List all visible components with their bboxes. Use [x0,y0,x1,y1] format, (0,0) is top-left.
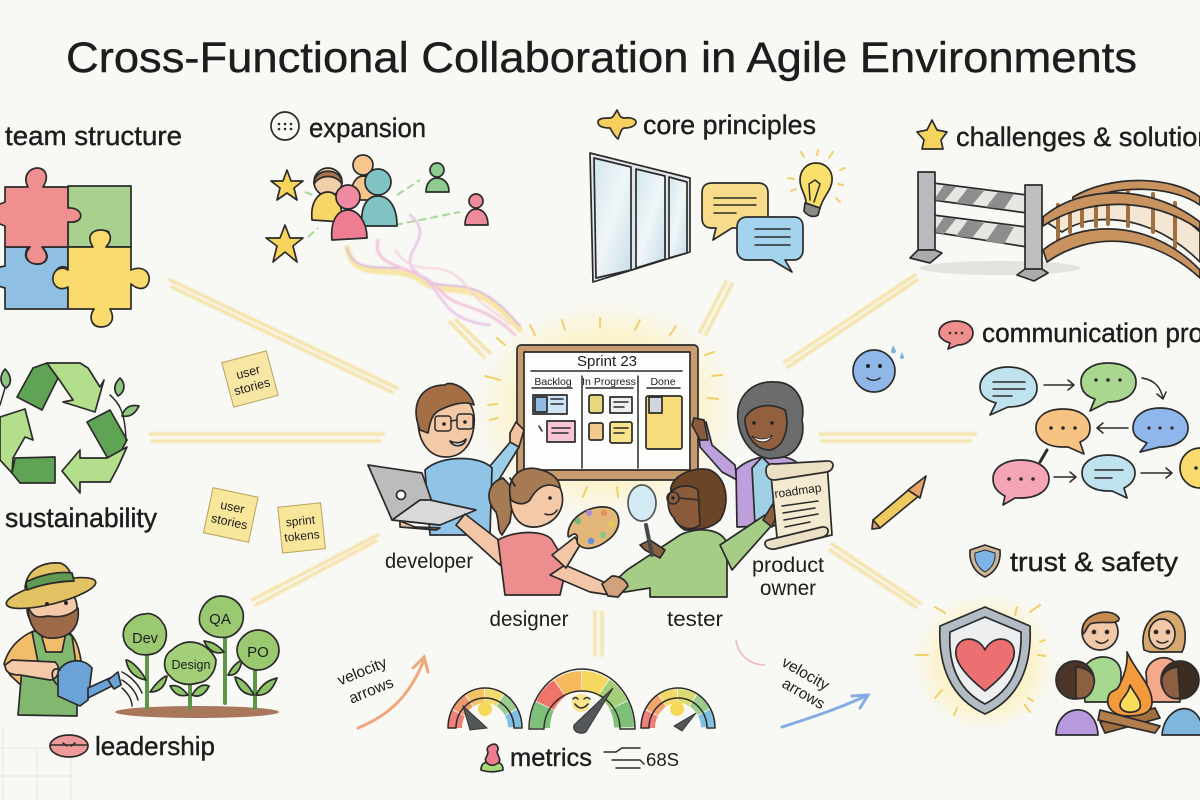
icon: handshake [602,576,628,597]
glow ticks [485,318,722,497]
character: product owner [692,382,803,527]
panel: challenges & solutions [910,120,1200,281]
heading: core principles: core principles [643,110,816,140]
icon: laptop [368,465,476,530]
top arrow light segment [47,363,104,412]
garbled suffix: 68S [646,750,679,770]
icon: recycling arrows [0,363,127,493]
gauge left [448,688,522,730]
glow sparks [916,605,1045,715]
icon: puzzle [0,168,149,327]
board column headers: Done [650,376,676,388]
label: designer: designer [490,608,568,631]
garbled suffix [604,748,679,770]
heading: sustainability: sustainability [5,503,157,533]
icon: paint palette [568,507,619,548]
icon: small pink person [465,194,488,225]
icon: star badge [917,120,947,149]
flow: yellow bubble [1180,448,1200,488]
sticky note: user stories: stories [232,375,272,398]
label: tester: tester [667,608,723,631]
panel: team structure [0,121,182,327]
icon: leaves [0,369,139,440]
icon: pencil [872,476,926,529]
icon: small green person [426,163,449,192]
plant head: PO: PO [247,644,269,661]
gauge centre [529,669,635,733]
sticky note: sprint tokens: tokens [284,527,320,545]
top arrow dark segment [17,363,58,410]
right arrow dark segment [87,410,127,457]
character: developer [416,384,524,535]
campfire [1098,652,1160,733]
icon: worried blue face [853,345,904,392]
velocity arrow right: arrows [779,675,828,713]
title: Cross-Functional Collaboration in Agile Environments [66,34,1137,82]
icon: window wall [590,153,690,282]
dashed connectors [305,180,460,237]
icon: watering can [52,661,121,706]
icon: light bulb [788,150,845,216]
icon: blue speech bubble [737,217,803,272]
light rays radiating from centre [150,275,975,655]
character: gardener [4,563,98,716]
flow arrows [1040,378,1172,482]
label: developer: developer [385,550,473,573]
heading: metrics: metrics [510,744,592,772]
flow: light blue bubble two [1082,455,1135,498]
flow: green bubble [1081,363,1136,411]
board title: Sprint 23 [577,353,637,370]
icon: stars [266,170,303,262]
flow: pink bubble [993,460,1049,505]
panel: trust & safety [913,545,1200,735]
icon: people group [312,155,397,240]
plant head: PO [237,630,279,670]
icon: metrics figure [481,744,503,772]
board cards [533,395,682,449]
heading: expansion: expansion [309,113,426,143]
icon: roadmap scroll: roadmap [773,480,823,501]
person: top left [1082,612,1121,702]
heading: trust & safety: trust & safety [1010,547,1179,577]
icon: small shield [970,545,1000,577]
panel: communication [939,318,1200,505]
group around campfire [1056,611,1200,735]
person: bottom right [1161,661,1200,735]
velocity arrow left [335,654,428,728]
bottom arrow dark segment [12,457,55,483]
label: product owner [752,554,824,600]
right arrow light segment [62,447,127,493]
gauge right [641,688,715,731]
plant head: Design: Design [172,658,210,672]
velocity arrow left: arrows [347,674,396,707]
plant head: QA [199,596,243,637]
heading: team structure: team structure [5,121,182,151]
icon: magnifier [628,485,656,555]
sticky note: user stories [222,351,278,407]
character: designer [456,468,610,595]
sticky note: user stories two: user [219,498,246,517]
sticky note: user stories two: stories [210,511,249,533]
board column headers [534,376,676,388]
sticky note: user stories: user [235,362,262,382]
label: product owner: owner [760,577,816,600]
heading: leadership: leadership [95,731,215,761]
icon: yellow speech bubble [702,183,768,240]
panel: core principles [590,110,845,282]
person: top right [1143,611,1185,702]
plant head: QA: QA [209,611,231,628]
left arrow light segment [0,409,33,473]
flow: light blue bubble [980,367,1037,415]
character: tester [605,469,778,597]
icon: leadership pink badge [50,735,88,757]
panel: metrics gauges [448,669,715,772]
sticky note: sprint tokens [278,503,325,553]
plant head: Dev: Dev [132,631,159,647]
icon: expansion bubble [271,112,299,140]
panel: leadership garden [4,563,279,761]
board glow [472,300,742,520]
soil [115,706,279,718]
wavy ribbons [347,215,520,335]
board column headers: Backlog [534,376,572,388]
icon: four point star [598,110,636,139]
sticky note: user stories two [204,488,258,542]
icon: barrier [910,172,1048,281]
plant head: Design [165,642,216,684]
flow: blue bubble [1133,408,1188,452]
velocity arrow right: velocity [779,654,832,695]
sticky note: sprint tokens: sprint [285,512,316,530]
velocity arrow right [736,640,868,727]
flow: orange bubble [1036,409,1090,454]
icon: red chat bubble [939,321,973,349]
icon: roadmap scroll [765,461,833,549]
shield glow [913,592,1057,732]
person: bottom left [1056,661,1098,735]
panel: central sprint board scene [368,300,833,631]
label: product owner: product [752,554,824,577]
panel: expansion [266,112,488,262]
plant head: Dev [123,614,166,655]
panel: sustainability [0,363,157,533]
water drops [122,672,142,706]
board column headers: In Progress [582,376,636,388]
plants [123,596,279,708]
kanban board [517,345,698,480]
velocity arrow left: velocity [335,654,390,689]
icon: wooden bridge [1043,180,1200,278]
icon: big shield with heart [940,607,1030,714]
shadow [920,261,1080,275]
